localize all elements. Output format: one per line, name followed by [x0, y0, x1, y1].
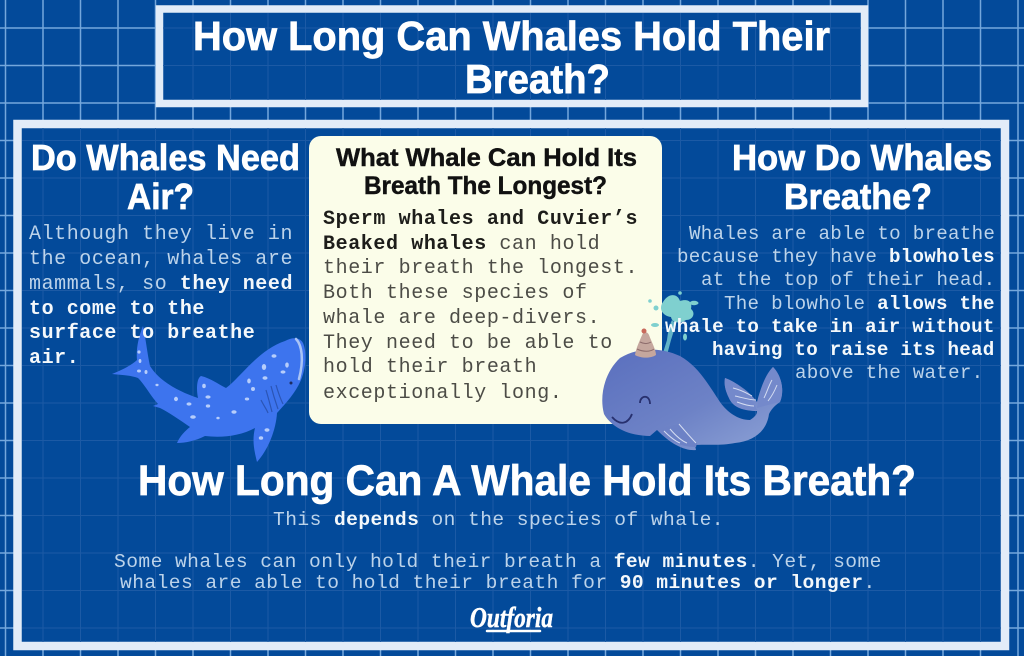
heading: how long: How Long Can A Whale Hold Its Breath?	[138, 457, 916, 505]
text: sperm and beaked whales	[323, 208, 638, 405]
icon: blue whale with party hat	[602, 291, 782, 450]
text: blowholes explanation: Whales are able to breathe	[689, 223, 995, 245]
text: sperm and beaked whales: their breath the longest.	[323, 257, 638, 280]
text: why whales need air: mammals, so they need	[29, 273, 293, 296]
panel: longest breath card	[309, 136, 662, 424]
heading: what whale holds longest: What Whale Can Hold Its	[336, 144, 637, 172]
heading: how do whales breathe: How Do Whales	[732, 137, 992, 178]
text: species and durations	[114, 509, 882, 594]
heading: do whales need air: Air?	[127, 176, 194, 217]
text: species and durations: whales are able to hold their breath for 90 minutes or longer.	[120, 572, 876, 594]
section: do whales need air	[29, 137, 300, 370]
icon: water spout	[648, 291, 698, 355]
text: blowholes explanation: at the top of their head.	[701, 269, 995, 291]
text: blowholes explanation: having to raise its head	[712, 339, 995, 361]
section: how do whales breathe	[665, 137, 995, 384]
heading: do whales need air: Do Whales Need	[31, 137, 300, 178]
section: longest breath text	[323, 144, 638, 405]
text: sperm and beaked whales: Both these species of	[323, 282, 588, 305]
icon: whale shark	[112, 326, 305, 462]
text: blowholes explanation: The blowhole allows the	[724, 293, 995, 315]
text: why whales need air: the ocean, whales are	[29, 248, 293, 271]
title: Breath?	[465, 56, 610, 102]
heading: what whale holds longest	[336, 144, 637, 200]
text: sperm and beaked whales: Sperm whales and Cuvier’s	[323, 208, 638, 231]
text: species and durations: Some whales can only hold their breath a few minutes. Yet, some	[114, 551, 882, 573]
title: How Long Can Whales Hold Their	[193, 13, 830, 59]
heading: how do whales breathe	[732, 137, 992, 217]
text: blowholes explanation: because they have blowholes	[677, 246, 995, 268]
logo: Outforia: Outforia	[470, 602, 553, 634]
text: why whales need air	[29, 223, 293, 370]
text: why whales need air: Although they live in	[29, 223, 293, 246]
heading: how do whales breathe: Breathe?	[784, 176, 932, 217]
text: blowholes explanation: whale to take in air without	[665, 316, 995, 338]
main panel frame	[18, 124, 1005, 646]
text: why whales need air: to come to the	[29, 298, 205, 321]
text: blowholes explanation	[665, 223, 995, 384]
text: blowholes explanation: above the water.	[795, 362, 983, 384]
heading: do whales need air	[31, 137, 300, 217]
title	[193, 13, 830, 102]
text: sperm and beaked whales: They need to be able to	[323, 332, 613, 355]
text: sperm and beaked whales: Beaked whales can hold	[323, 233, 600, 256]
title panel	[160, 9, 864, 104]
text: why whales need air: surface to breathe	[29, 322, 255, 345]
text: why whales need air: air.	[29, 347, 79, 370]
text: sperm and beaked whales: hold their breath	[323, 356, 537, 379]
icon: party hat	[635, 328, 656, 358]
section: how long can a whale hold its breath	[114, 457, 916, 594]
text: sperm and beaked whales: exceptionally long.	[323, 382, 562, 405]
text: sperm and beaked whales: whale are deep-divers.	[323, 307, 600, 330]
heading: what whale holds longest: Breath The Longest?	[364, 172, 607, 200]
text: species and durations: This depends on the species of whale.	[273, 509, 724, 531]
